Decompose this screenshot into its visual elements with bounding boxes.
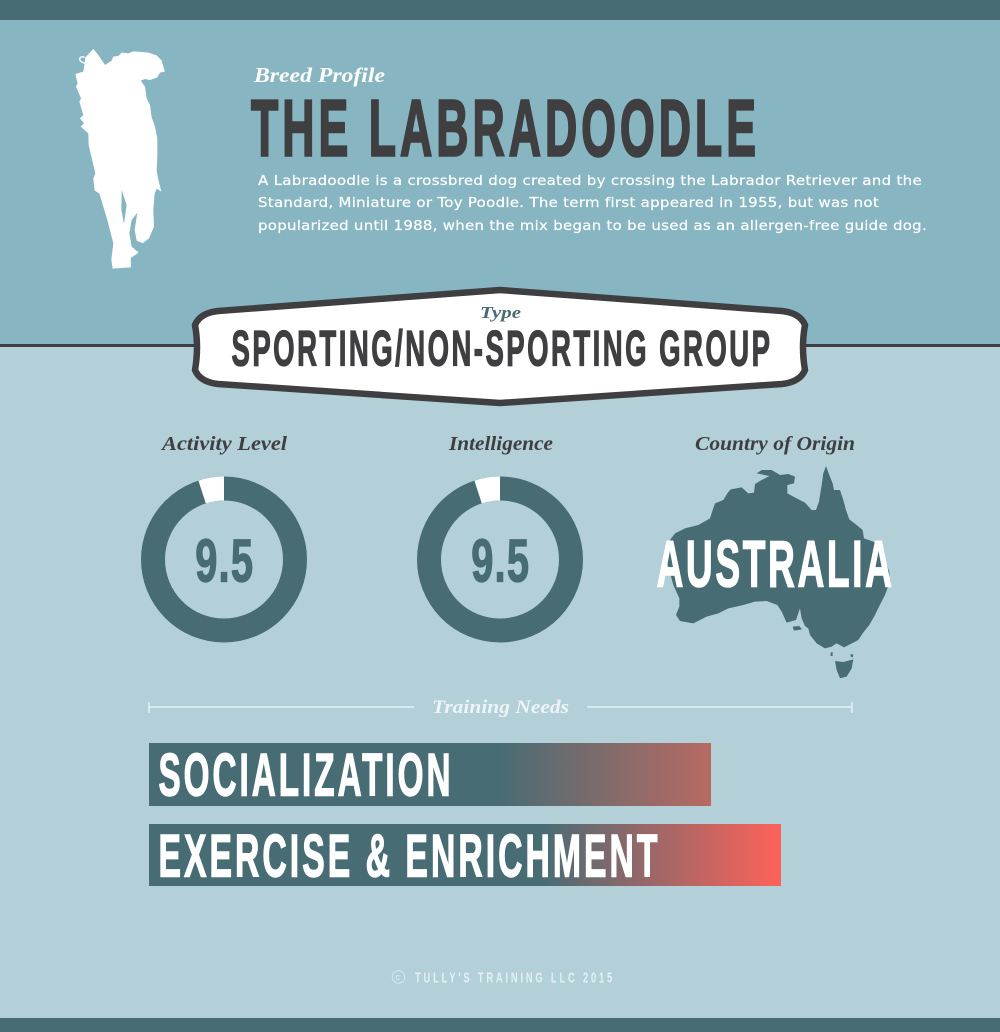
- description text: A Labradoodle is a crossbred dog created by crossing the Labrador Retriever and the: [258, 174, 922, 189]
- description text: Standard, Miniature or Toy Poodle. The term first appeared in 1955, but was not: [258, 196, 879, 211]
- donut chart: activity level: [153, 476, 295, 630]
- description text: [258, 174, 927, 234]
- bottom band: [0, 1018, 1000, 1032]
- heading: Intelligence: Intelligence: [448, 433, 553, 455]
- training needs heading: Training Needs: [432, 697, 569, 718]
- donut chart: intelligence: [429, 476, 571, 630]
- donut chart: intelligence: 9.5: [471, 528, 530, 594]
- subtitle: Breed Profile: Breed Profile: [253, 63, 385, 87]
- heading: Activity Level: Activity Level: [160, 433, 287, 455]
- divider line: [0, 344, 1000, 347]
- copyright: TULLY'S TRAINING LLC 2015: [415, 970, 615, 986]
- heading: Country of Origin: Country of Origin: [695, 433, 855, 455]
- copyright: c: [396, 972, 400, 982]
- training needs heading: [149, 697, 852, 718]
- badge shape: [195, 290, 805, 403]
- top band: [0, 0, 1000, 20]
- header background: [0, 0, 1000, 346]
- donut chart: activity level: 9.5: [195, 528, 254, 594]
- lower background: [0, 346, 1000, 1032]
- type badge: [195, 290, 805, 403]
- map: Australia: [656, 466, 894, 678]
- badge label: Type: [480, 303, 522, 322]
- copyright: [392, 970, 615, 986]
- description text: popularized until 1988, when the mix began to be used as an allergen-free guide dog.: [258, 219, 927, 234]
- icon: dog silhouette: [75, 49, 165, 269]
- bar: socialization: SOCIALIZATION: [158, 742, 454, 808]
